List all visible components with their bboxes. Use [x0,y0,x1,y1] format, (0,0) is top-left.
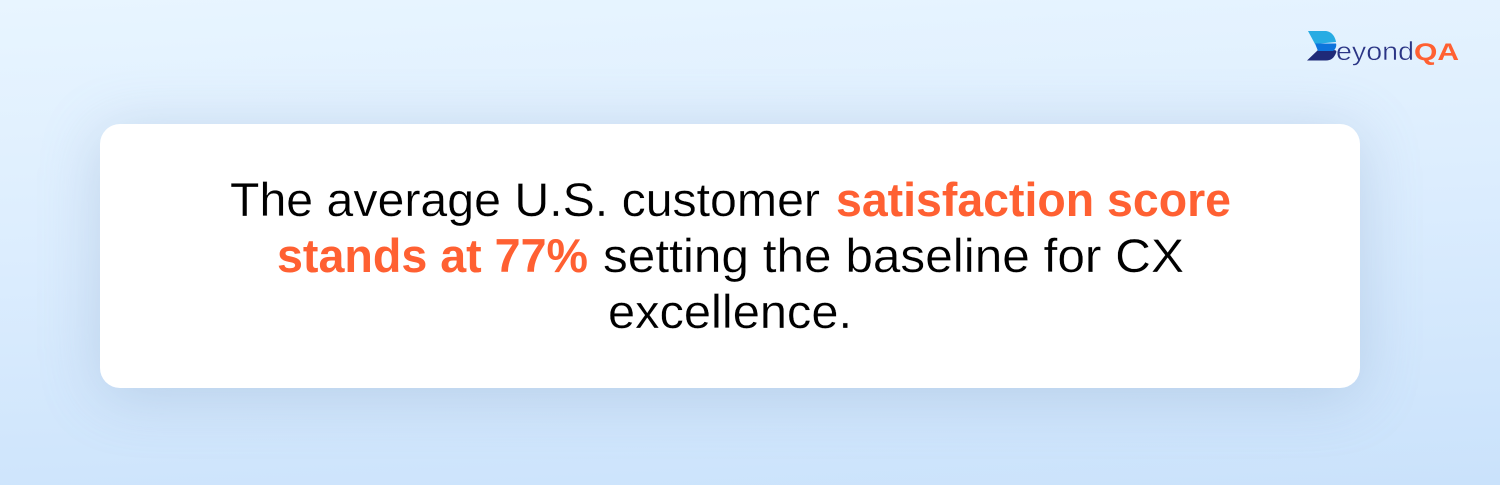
statement text: setting the baseline for CX [603,229,1184,282]
icon: logo mark [1307,31,1336,60]
statement text: satisfaction score [836,173,1231,226]
panel: white card [100,124,1360,388]
statement text: The average U.S. customer [230,173,820,226]
logo wordmark: eyond [1336,36,1414,66]
statement text: excellence. [608,285,852,338]
logo: BeyondQA: QA [1414,39,1459,66]
statement text: stands at 77% [277,229,588,282]
